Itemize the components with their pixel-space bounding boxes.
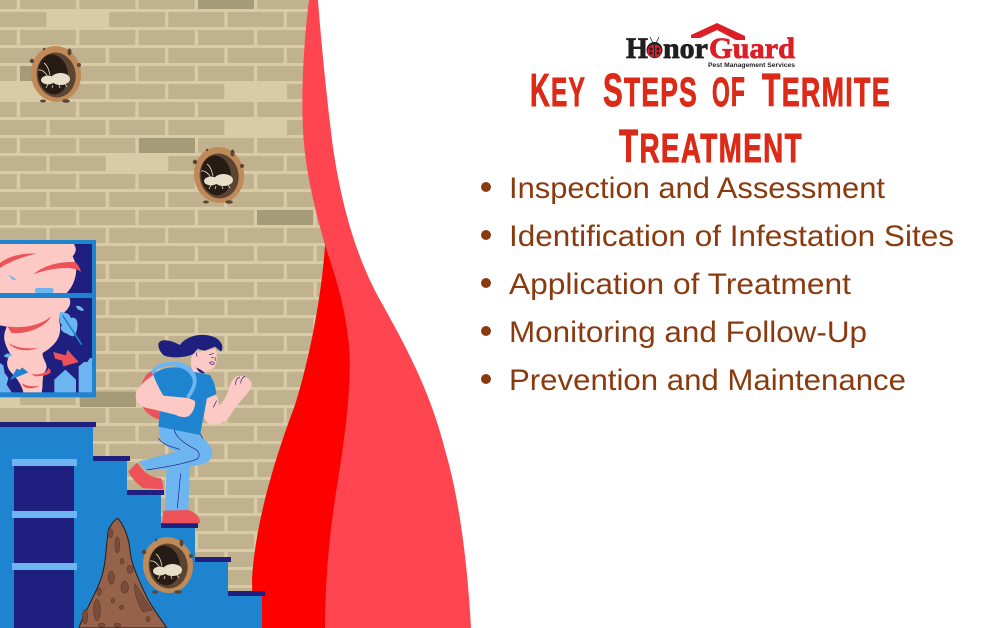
brick wall [0,0,335,628]
termite mound [79,518,167,628]
title: KEY [530,64,586,116]
termite hole 2 [190,144,248,206]
termite hole 3 [139,534,197,596]
logo wordmark [626,32,795,65]
backpack strap [151,362,197,398]
bullet list of treatment steps [481,172,954,397]
stair caps [0,422,265,596]
legs and shoes [128,427,212,523]
tornado upper [0,244,76,293]
title: TREATMENT [619,120,803,172]
bullet list of treatment steps: Application of Treatment [509,268,852,301]
logo roof [691,23,745,40]
bullet list of treatment steps: Monitoring and Follow-Up [509,316,867,349]
logo wordmark: Guard [709,32,795,65]
near arm [136,375,195,417]
window with tornado [0,240,96,397]
tornado lower [0,298,70,392]
logo ladybug [646,37,662,58]
logo tagline: Pest Management Services [708,62,795,69]
termite hole 1 [27,43,85,105]
title: TERMITE [762,64,891,116]
hair [158,335,222,357]
logo wordmark: nor [663,32,708,65]
bullet list of treatment steps: Prevention and Maintenance [509,364,906,397]
logo wordmark: o [648,32,662,65]
title: OF [712,69,746,115]
bullet list of treatment steps: Identification of Infestation Sites [509,220,954,253]
title: STEPS [603,64,698,116]
face details [196,367,205,373]
bullet list of treatment steps: Inspection and Assessment [509,172,886,205]
stairs [0,422,265,628]
running woman with backpack [128,335,252,523]
backpack [140,370,168,420]
leaves and silhouettes [0,275,92,392]
head [191,348,217,373]
door under stairs [12,459,77,628]
torso [153,367,216,435]
title [530,64,891,172]
logo: HonorGuard [626,23,795,69]
far arm [204,376,252,425]
tornado streaks [0,254,81,388]
upper body [136,335,252,435]
curtain: red drape [252,245,350,628]
curtain: coral drape [302,0,471,628]
logo wordmark: H [626,32,648,65]
